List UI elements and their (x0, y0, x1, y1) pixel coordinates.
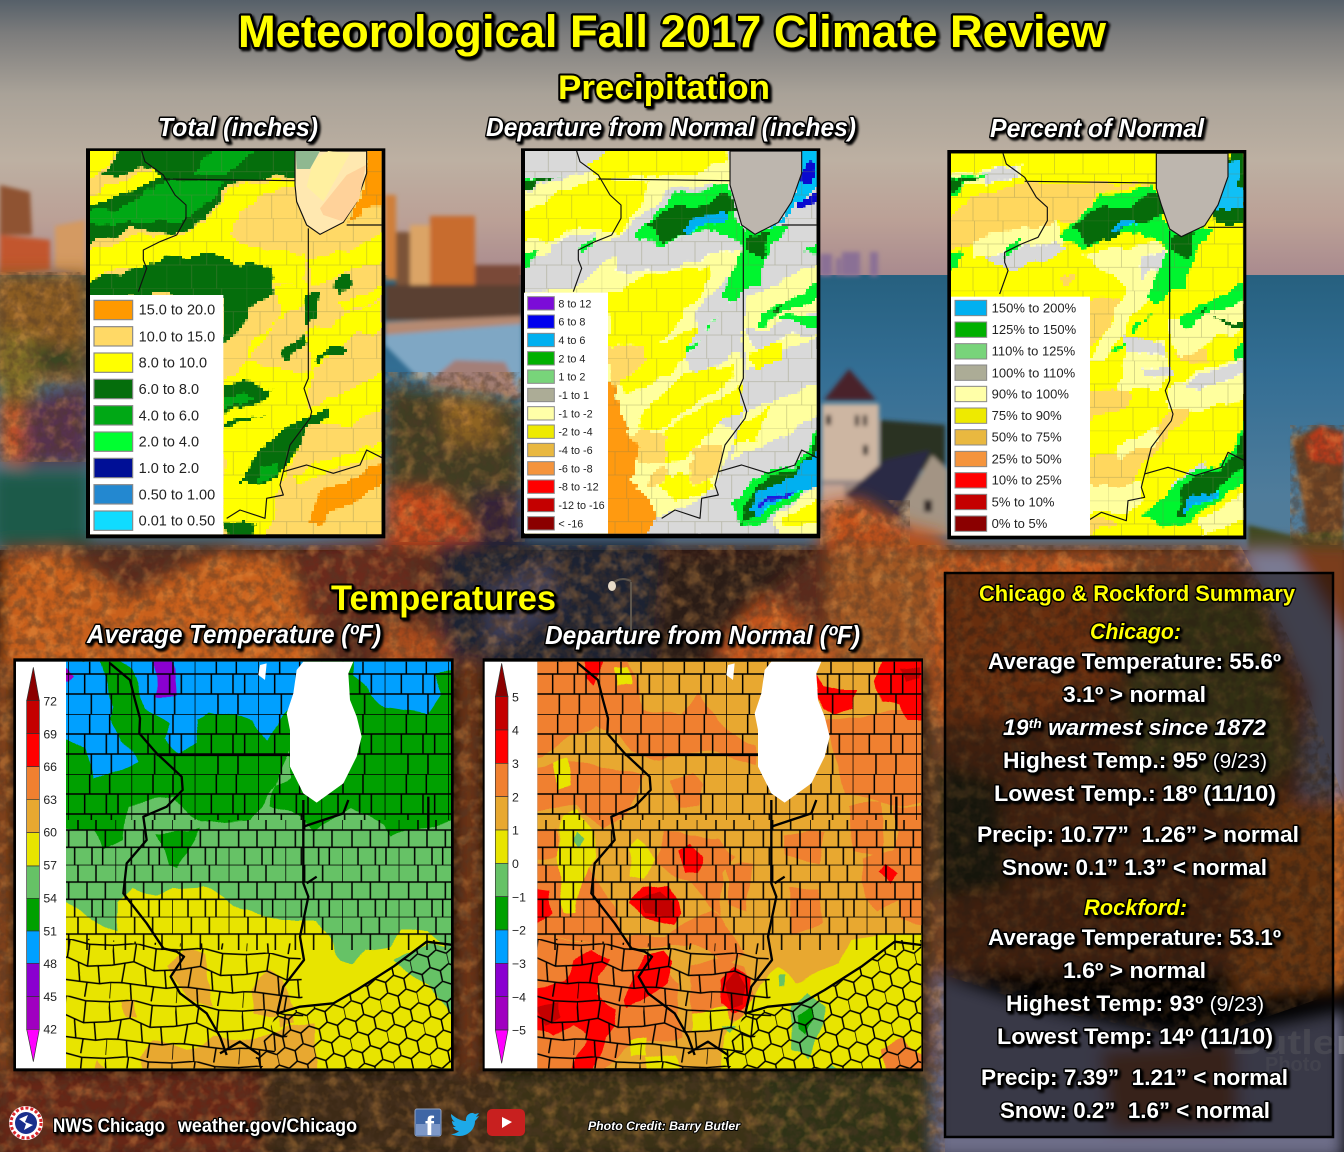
colour scale: average temperature: 69 (43, 727, 57, 741)
legend: departure inches: 2 to 4 (558, 353, 585, 365)
colour scale: temperature departure: −3 (512, 957, 526, 971)
panel: total precipitation map (86, 148, 385, 538)
legend: departure inches: 8 to 12 (558, 298, 591, 310)
Chicago statistics: 19 (1003, 715, 1027, 740)
colour scale: temperature departure: −2 (512, 924, 526, 938)
Rockford statistics: Rockford: (1084, 895, 1187, 920)
Chicago statistics (977, 619, 1299, 880)
legend: departure inches: -12 to -16 (558, 500, 605, 512)
legend: total precipitation: 0.50 to 1.00 (139, 487, 215, 503)
lawn (60, 540, 240, 590)
colour scale: temperature departure (485, 662, 537, 1068)
panel: precipitation departure map (521, 148, 820, 538)
Chicago statistics: Lowest Temp.: 18º (11/10) (994, 781, 1276, 806)
legend: departure inches: -1 to 1 (558, 390, 589, 402)
panel: Chicago and Rockford summary (945, 573, 1333, 1137)
colour scale: average temperature: 57 (43, 859, 57, 873)
heading: precipitation: Precipitation (558, 69, 770, 107)
legend: departure inches: 4 to 6 (558, 335, 585, 347)
Rockford statistics: Lowest Temp: 14º (11/10) (997, 1024, 1273, 1049)
far skyline (820, 252, 878, 276)
Chicago statistics: 3.1º > normal (1063, 682, 1206, 707)
Chicago statistics: Snow: 0.1” 1.3” < normal (1002, 855, 1267, 880)
colour scale: average temperature: 42 (43, 1023, 57, 1037)
legend: total precipitation (90, 295, 223, 534)
photographer watermark: Butler (1232, 1024, 1344, 1062)
autumn canopy (0, 545, 945, 670)
grounds behind the summary (945, 545, 1344, 975)
Rockford statistics (981, 895, 1288, 1123)
subheading: total inches: Total (inches) (158, 112, 318, 142)
legend: percent of normal: 50% to 75% (992, 430, 1062, 445)
legend: total precipitation: 1.0 to 2.0 (139, 461, 199, 477)
legend: percent of normal: 90% to 100% (992, 386, 1069, 401)
Chicago statistics: warmest since 1872 (1042, 715, 1267, 740)
legend: departure inches: 6 to 8 (558, 317, 585, 329)
legend: total precipitation: 2.0 to 4.0 (139, 435, 199, 451)
legend: percent of normal: 25% to 50% (992, 451, 1062, 466)
legend: departure inches: -4 to -6 (558, 445, 593, 457)
footer band (0, 1070, 260, 1152)
legend: total precipitation: 8.0 to 10.0 (139, 356, 207, 372)
colour scale: temperature departure: 2 (512, 790, 519, 804)
Chicago statistics: Precip: 10.77” 1.26” > normal (977, 822, 1299, 847)
Chicago statistics: Average Temperature: 55.6º (988, 649, 1281, 674)
Chicago statistics: Highest Temp.: 95º (9/23) (1003, 748, 1267, 773)
tree at far right (1292, 425, 1344, 545)
colour scale: temperature departure: 3 (512, 757, 519, 771)
Rockford statistics: Precip: 7.39” 1.21” < normal (981, 1065, 1288, 1090)
legend: percent of normal: 150% to 200% (992, 301, 1077, 316)
legend: departure inches: -6 to -8 (558, 463, 593, 475)
colour scale: average temperature (16, 662, 66, 1068)
tower and house (822, 369, 948, 535)
panel: average temperature map (13, 658, 457, 1073)
colour scale: average temperature: 54 (43, 891, 57, 905)
subheading: percent of normal: Percent of Normal (990, 113, 1205, 143)
legend: percent of normal: 0% to 5% (992, 516, 1048, 531)
colour scale: temperature departure: 0 (512, 857, 519, 871)
orange bushes below house (820, 498, 945, 552)
colour scale: temperature departure: −1 (512, 890, 526, 904)
Chicago statistics: th (1029, 716, 1042, 731)
colour scale: temperature departure: −4 (512, 990, 526, 1004)
icon: YouTube (487, 1109, 525, 1136)
legend: percent of normal: 75% to 90% (992, 408, 1062, 423)
legend: departure inches: -8 to -12 (558, 482, 599, 494)
colour scale: average temperature: 45 (43, 990, 57, 1004)
photographer watermark: Photo (1265, 1054, 1322, 1076)
colour scale: average temperature: 51 (43, 924, 57, 938)
panel: percent of normal map (947, 150, 1246, 540)
legend: departure inches: -2 to -4 (558, 427, 593, 439)
subheading: departure inches: Departure from Normal (inches) (486, 112, 856, 142)
legend: percent of normal: 125% to 150% (992, 322, 1077, 337)
legend: total precipitation: 10.0 to 15.0 (139, 329, 215, 345)
legend: departure inches: < -16 (558, 518, 583, 530)
near buildings centre (385, 195, 396, 280)
colour scale: temperature departure: −5 (512, 1024, 526, 1038)
icon: NWS logo (9, 1106, 43, 1140)
Rockford statistics: Highest Temp: 93º (9/23) (1006, 991, 1264, 1016)
footer: NWS Chicago: NWS Chicago (53, 1116, 165, 1137)
Rockford statistics: Average Temperature: 53.1º (988, 925, 1281, 950)
legend: percent of normal (951, 297, 1090, 536)
subheading: average temperature: Average Temperature (ºF) (86, 619, 381, 649)
legend: departure inches: 1 to 2 (558, 372, 585, 384)
colour scale: average temperature: 63 (43, 793, 57, 807)
centre trees (385, 385, 522, 545)
title: Meteorological Fall 2017 Climate Review (238, 6, 1107, 57)
summary heading: Chicago & Rockford Summary (979, 581, 1296, 606)
panel: temperature departure map (483, 658, 929, 1073)
icon: Twitter (451, 1113, 479, 1136)
colour scale: average temperature: 72 (43, 694, 57, 708)
colour scale: temperature departure: 4 (512, 724, 519, 738)
icon: Facebook (415, 1109, 441, 1141)
legend: total precipitation: 6.0 to 8.0 (139, 382, 199, 398)
legend: total precipitation: 4.0 to 6.0 (139, 408, 199, 424)
colour scale: average temperature: 48 (43, 957, 57, 971)
photographer watermark (1232, 1024, 1344, 1076)
colour scale: average temperature: 60 (43, 826, 57, 840)
icon: Facebook: f (425, 1111, 435, 1141)
near buildings left (0, 185, 32, 235)
subheading: temperature departure: Departure from Normal (ºF) (545, 620, 860, 650)
legend: percent of normal: 110% to 125% (992, 344, 1076, 359)
left trees (0, 272, 90, 382)
colour scale: temperature departure: 1 (512, 824, 519, 838)
lamp post (608, 579, 632, 642)
side strips (0, 660, 14, 1080)
legend: departure inches: -1 to -2 (558, 408, 593, 420)
legend: total precipitation: 0.01 to 0.50 (139, 514, 215, 530)
Rockford statistics: 1.6º > normal (1063, 958, 1206, 983)
colour scale: temperature departure: 5 (512, 690, 519, 704)
footer: website: weather.gov/Chicago (177, 1116, 357, 1137)
heading: temperatures: Temperatures (331, 579, 556, 618)
legend: percent of normal: 100% to 110% (992, 365, 1076, 380)
Chicago statistics: Chicago: (1090, 619, 1181, 644)
photo credit: Photo Credit: Barry Butler (588, 1119, 741, 1133)
colour scale: average temperature: 66 (43, 760, 57, 774)
legend: total precipitation: 15.0 to 20.0 (139, 303, 215, 319)
legend: percent of normal: 10% to 25% (992, 473, 1062, 488)
Rockford statistics: Snow: 0.2” 1.6” < normal (1000, 1098, 1270, 1123)
legend: departure inches (524, 293, 608, 533)
legend: percent of normal: 5% to 10% (992, 494, 1055, 509)
